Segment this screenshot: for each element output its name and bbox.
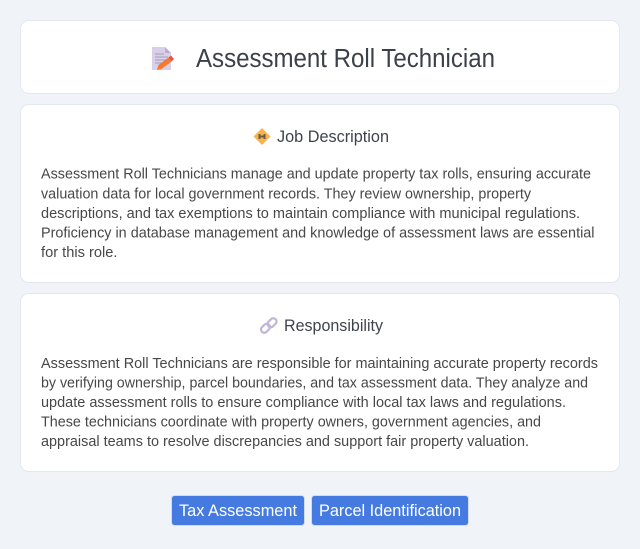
text block: job description: Assessment Roll Technicians manage and update property tax rolls, ensuring accurate [41, 166, 591, 183]
text block: job description [41, 166, 594, 261]
text block: responsibility: appraisal teams to resolve discrepancies and support fair property valuation. [41, 433, 529, 450]
icon: document with pencil [152, 47, 174, 70]
heading: job description: Job Description [277, 128, 389, 146]
panel: responsibility [20, 294, 620, 472]
icon: chain link [260, 317, 278, 334]
icon: orange diamond sign [254, 128, 270, 145]
tag: tax assessment [172, 496, 304, 526]
text block: responsibility: Assessment Roll Technicians are responsible for maintaining accurate property records [41, 355, 598, 372]
tag: tax assessment: Tax Assessment [179, 502, 297, 520]
panel: job description [20, 104, 620, 282]
tag: parcel identification [312, 496, 468, 526]
text block: job description: descriptions, and tax exemptions to maintain compliance with municipal regulations. [41, 205, 580, 222]
text block: job description: for this role. [41, 244, 118, 261]
panel: title header [20, 20, 620, 94]
text block: job description: valuation data for local government records. They review ownership, property [41, 185, 531, 202]
text block: responsibility: by verifying ownership, parcel boundaries, and tax assessment data. They analyze and [41, 375, 588, 392]
text block: responsibility: update assessment rolls to ensure compliance with local tax laws and regulations. [41, 394, 566, 411]
heading: responsibility: Responsibility [284, 317, 384, 335]
title: Assessment Roll Technician [196, 45, 495, 73]
text block: responsibility [41, 355, 598, 450]
text block: responsibility: These technicians coordinate with property owners, government agencies, and [41, 414, 541, 431]
tag: parcel identification: Parcel Identification [319, 502, 461, 520]
text block: job description: Proficiency in database management and knowledge of assessment laws are essential [41, 225, 594, 242]
